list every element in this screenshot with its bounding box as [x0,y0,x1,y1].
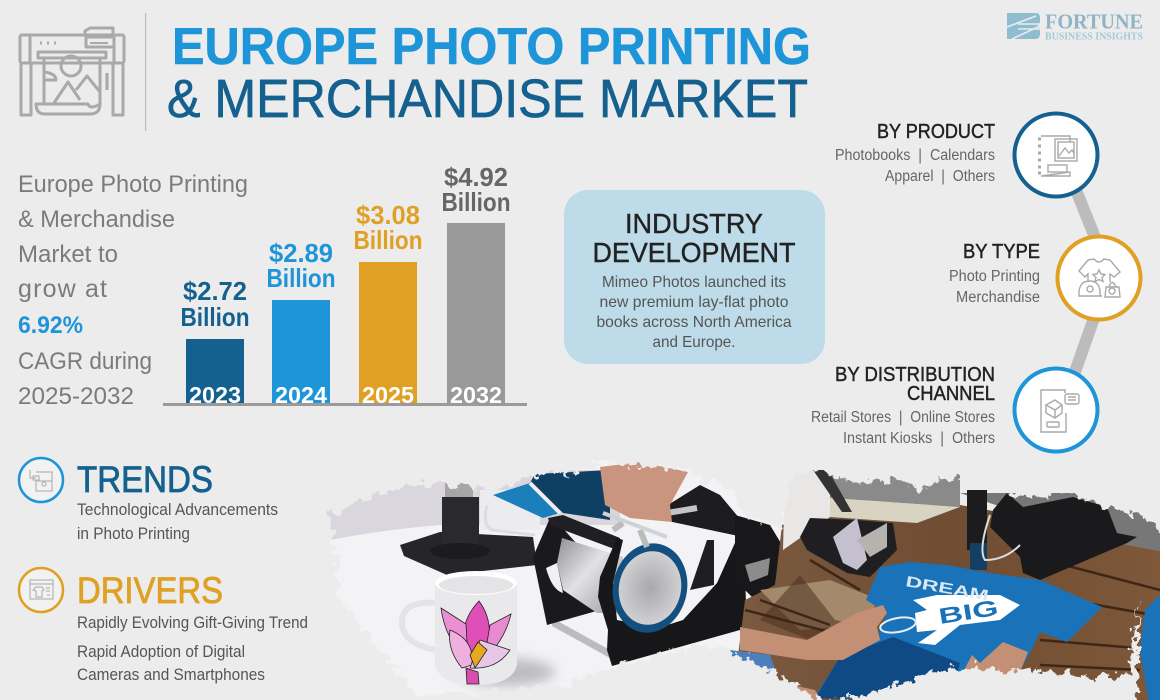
blue t-shirt [815,562,1102,700]
panel: industry development [564,190,825,364]
press base plate [400,532,537,575]
text block: market growth summary: CAGR during [18,348,152,375]
blue shirt edge at right [1140,590,1160,700]
segment: by type: Photo Printing [949,268,1040,285]
press rear arm and leg [670,485,738,536]
bar 2032: Billion [442,187,510,217]
press blue ring [612,543,688,633]
segment: by type [949,236,1140,320]
segment: by distribution channel [811,364,1098,452]
title: EUROPE PHOTO PRINTING [172,18,811,76]
photo: white table with mug press [325,458,784,698]
icon: photobook [1014,114,1098,196]
segment: by product: BY PRODUCT [877,121,995,143]
connector lines [1064,160,1108,400]
back wall [783,470,830,550]
section: drivers: DRIVERS [77,570,223,611]
section: trends [19,458,278,543]
section: drivers [19,568,308,684]
photo collage: mug press and t-shirt printing [300,440,1160,700]
logo: Fortune Business Insights [1007,10,1143,42]
bar 2024: Billion [266,263,336,293]
section: drivers: Rapidly Evolving Gift-Giving Trend [77,614,308,632]
bar 2032: $4.92 [444,162,508,192]
bar 2025: 2025 [362,382,414,408]
section: trends: in Photo Printing [77,525,190,543]
text block: market growth summary: Europe Photo Printing [18,171,248,198]
text block: market growth summary: 2025-2032 [18,383,134,410]
segment: by type: Merchandise [956,289,1040,306]
flower on mug [441,601,511,684]
mug [402,571,555,686]
title: & MERCHANDISE MARKET [167,69,808,129]
wood light and grain [760,580,880,630]
icon: t-shirt, cap and bag [1058,236,1140,320]
logo: Fortune Business Insights: BUSINESS INSIGHTS [1045,32,1143,42]
segment: by product: Photobooks | Calendars [835,147,995,164]
icon: phone with parcel [1014,368,1098,452]
bar 2023: 2023 [189,382,241,408]
press right black plate [598,525,747,666]
hands on t-shirt [740,605,1028,700]
hand on press [600,462,688,522]
panel: industry development: new premium lay-flat photo [600,294,789,311]
segment: by distribution channel: BY DISTRIBUTION [835,364,995,386]
text block: market growth summary: grow at [18,275,107,303]
press left black plate [533,518,600,625]
section: drivers: Cameras and Smartphones [77,666,265,684]
text block: market growth summary: & Merchandise [18,206,175,233]
bar 2024: $2.89 [269,238,333,268]
bar chart: market size [180,162,510,408]
panel: industry development: and Europe. [652,334,736,351]
press top bar [548,515,620,550]
press cylinder [557,538,623,613]
large flat press [990,493,1137,580]
icon: large format printer [20,28,124,115]
panel: industry development: DEVELOPMENT [592,237,796,268]
icon: trends badge [19,458,63,502]
press blue heat plate [493,483,560,518]
icon: drivers badge [19,568,63,612]
panel: industry development: books across North America [596,314,792,331]
segment: by distribution channel: Instant Kiosks | Others [843,430,995,447]
section: trends: Technological Advancements [77,501,278,519]
segment: by distribution channel: Retail Stores | Online Stores [811,409,995,426]
press handle [613,523,647,547]
section: drivers: Rapid Adoption of Digital [77,643,245,661]
black torn blotch [735,515,782,600]
segment: by product [835,114,1098,196]
bar 2024: 2024 [275,382,327,408]
text block: market growth summary [18,171,248,410]
bar 2024 [266,238,336,408]
segment: by type: BY TYPE [963,241,1040,263]
divider line [145,13,146,131]
segment: by product: Apparel | Others [885,168,995,185]
panel: industry development: INDUSTRY [625,208,763,239]
bar 2025: $3.08 [356,200,420,230]
bar 2025: Billion [354,225,422,255]
DREAM BIG print: DREAM [904,573,990,605]
small mug press in background [800,518,897,577]
bar 2032: 2032 [450,382,502,408]
segment: by distribution channel: CHANNEL [907,383,995,405]
text block: market growth summary: 6.92% [18,312,83,339]
title [167,18,811,129]
bar 2023: Billion [180,302,250,332]
bar 2025 [354,200,422,408]
bar 2023: $2.72 [183,276,247,306]
press silver bar [552,618,610,658]
blue patch at lower left [730,650,778,676]
DREAM BIG print: BIG [937,595,1000,629]
logo: Fortune Business Insights: FORTUNE [1045,10,1143,34]
section: trends: TRENDS [77,459,213,500]
bar 2023 [180,276,250,408]
text block: market growth summary: Market to [18,241,118,268]
DREAM BIG print [879,573,1020,645]
bar 2032 [442,162,510,408]
panel: industry development: Mimeo Photos launched its [602,274,786,291]
photo: wooden table with t-shirt [725,465,1160,700]
